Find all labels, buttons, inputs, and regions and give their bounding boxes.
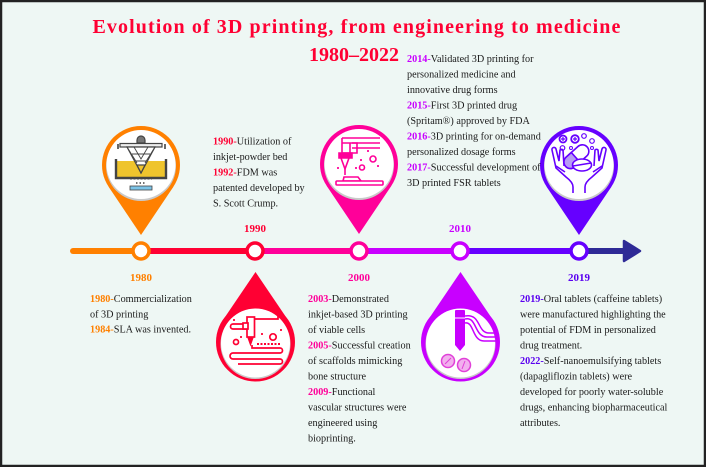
text block 2000: 2009-Functional (308, 387, 376, 398)
text block 2000: of scaffolds mimicking (308, 356, 402, 367)
icon: hands holding medicine (552, 134, 606, 193)
text block 1990 (213, 136, 306, 210)
year labels: 2000 (348, 272, 370, 284)
text block 1980 (90, 294, 192, 336)
text block 2000 (308, 294, 411, 444)
pin 1980 with SLA printer icon (102, 126, 180, 235)
text block 2010: 2017-Successful development of (407, 162, 541, 174)
text block 2010: 3D printed FSR tablets (407, 178, 501, 189)
text block 1980: 1980-Commercialization (90, 294, 192, 305)
text block 2010: personalized dosage forms (407, 147, 516, 158)
text block 2010 (407, 54, 541, 189)
text block 2010: 2015-First 3D printed drug (407, 100, 517, 112)
title: Evolution of 3D printing, from engineering to medicine (92, 16, 622, 38)
text block 2000: inkjet-based 3D printing (308, 310, 408, 320)
text block 2019: attributes. (520, 418, 560, 429)
text block 1990: patented developed by (213, 183, 306, 194)
text block 2019: drug treatment. (520, 340, 582, 352)
icon: nozzle depositing layers (230, 315, 282, 364)
year labels: 1980 (130, 272, 152, 284)
year labels (130, 223, 590, 284)
icon: printing pen and tablets (442, 310, 497, 372)
text block 2000: 2005-Successful creation (308, 340, 411, 352)
arrow head (624, 241, 640, 261)
pin 2010 with pen icon (421, 272, 500, 382)
year labels: 2019 (568, 272, 590, 284)
year labels: 1990 (244, 223, 266, 235)
title (92, 16, 622, 66)
text block 2019: 2019-Oral tablets (caffeine tablets) (520, 294, 662, 305)
text block 1990: inkjet-powder bed (213, 152, 287, 163)
text block 2019: potential of FDM in personalized (520, 325, 656, 336)
text block 2019: drugs, enhancing biopharmaceutical (520, 402, 668, 414)
year labels: 2010 (449, 223, 472, 235)
text block 2010: (Spritam®) approved by FDA (407, 116, 531, 127)
text block 1980: 1984-SLA was invented. (90, 324, 191, 336)
text block 1990: 1992-FDM was (213, 168, 277, 178)
text block 2019: developed for poorly water-soluble (520, 387, 664, 398)
text block 2010: 2016-3D printing for on-demand (407, 132, 541, 142)
text block 2019: 2022-Self-nanoemulsifying tablets (520, 356, 661, 367)
pin 2000 with printer icon (320, 125, 398, 234)
timeline (73, 241, 640, 261)
icon: vat printer (116, 136, 166, 190)
text block 2000: vascular structures were (308, 402, 407, 414)
pin 1990 with printer icon (216, 272, 295, 382)
text block 1990: S. Scott Crump. (213, 198, 278, 210)
text block 2010: 2014-Validated 3D printing for (407, 54, 534, 65)
icon: bioprinter head (336, 138, 383, 185)
text block 2019 (520, 294, 668, 429)
pin 2019 with hands icon (540, 126, 618, 235)
text block 2000: bone structure (308, 372, 366, 382)
text block 2010: innovative drug forms (407, 85, 498, 96)
text block 2000: engineered using (308, 418, 377, 429)
title: 1980–2022 (309, 44, 399, 66)
text block 1980: of 3D printing (90, 310, 148, 320)
text block 2000: bioprinting. (308, 434, 356, 444)
text block 2000: 2003-Demonstrated (308, 294, 389, 305)
text block 2010: personalized medicine and (407, 70, 516, 80)
text block 2019: (dapagliflozin tablets) were (520, 372, 632, 382)
text block 2000: of viable cells (308, 325, 365, 336)
text block 2019: were manufactured highlighting the (520, 310, 666, 320)
text block 1990: 1990-Utilization of (213, 136, 292, 148)
